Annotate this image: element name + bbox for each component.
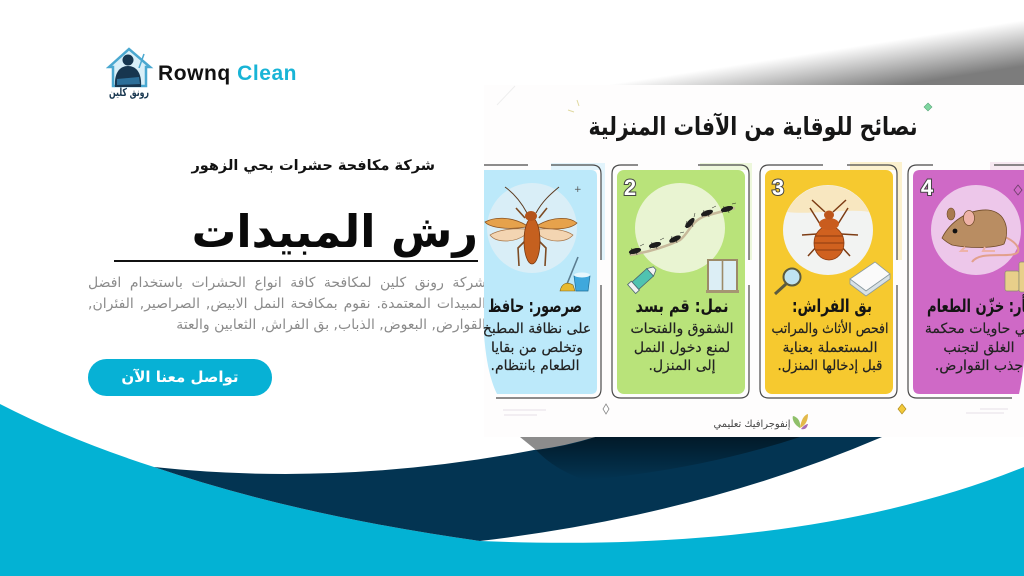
- card 3 heading: بق الفراش:: [792, 296, 872, 317]
- icon: mop and bucket: [560, 257, 590, 291]
- card 2 body text: إلى المنزل.: [648, 358, 716, 374]
- card 1: cockroach: +: [574, 185, 582, 195]
- card 3: bed bug: [760, 162, 902, 398]
- icon: sealant tube: [628, 264, 659, 294]
- number 2: 2: [624, 175, 636, 200]
- description paragraph: [88, 275, 486, 333]
- contact button: [88, 359, 272, 396]
- card 3 body text: المستعملة بعناية: [783, 340, 877, 356]
- icon: food jars: [1005, 262, 1024, 292]
- contact button: تواصل معنا الآن: [121, 368, 239, 386]
- card 1 heading: صرصور: حافظ: [488, 296, 582, 317]
- icon: mattress: [850, 262, 890, 296]
- icon: green diamond: [924, 103, 932, 111]
- card 4 body text: جذب القوارض.: [935, 358, 1023, 374]
- icon: ant trail: [629, 203, 736, 255]
- card 1 body text: وتخلص من بقايا: [491, 340, 583, 356]
- icon: leaves: [793, 414, 808, 429]
- card 1: cockroach: [483, 163, 605, 398]
- card 1 body text: [483, 321, 591, 374]
- brand name: Rownq Clean: [158, 62, 297, 85]
- card 2 body text: الشقوق والفتحات: [631, 321, 733, 337]
- card 3 body text: [772, 319, 888, 374]
- card 2 body text: [631, 321, 733, 374]
- footer label: إنفوجرافيك تعليمي: [714, 419, 791, 430]
- icon: bed bug: [802, 200, 858, 260]
- logo: [106, 47, 154, 99]
- card 2: ants: [612, 163, 752, 398]
- card 2 body text: لمنع دخول النمل: [634, 340, 730, 356]
- subtitle: شركة مكافحة حشرات بحي الزهور: [191, 158, 435, 174]
- icon: magnifying glass: [775, 268, 800, 294]
- card 3 body text: افحص الأثاث والمراتب: [772, 319, 888, 337]
- icon: mouse: [942, 208, 1018, 262]
- description paragraph: شركة رونق كلين لمكافحة كافة انواع الحشرات باستخدام افضل: [88, 275, 486, 291]
- card 4 body text: الغلق لتجنب: [943, 340, 1015, 356]
- decorative sparks: [497, 86, 579, 112]
- main heading: [114, 200, 478, 262]
- card 4: mouse: [908, 162, 1024, 398]
- card 1 body text: على نظافة المطبخ: [484, 321, 591, 337]
- card 3 body text: قبل إدخالها المنزل.: [778, 358, 882, 374]
- icon: yellow diamond: [898, 404, 906, 414]
- card 1 body text: الطعام بانتظام.: [491, 358, 579, 374]
- description paragraph: المبيدات المعتمدة. نقوم بمكافحة النمل الابيض, الصراصير, الفئران,: [88, 296, 486, 312]
- card 2 heading: نمل: قم بسد: [636, 296, 728, 317]
- number 4: 4: [921, 175, 934, 200]
- card 4 body text: [925, 321, 1024, 374]
- number 3: 3: [772, 175, 784, 200]
- icon: window: [706, 260, 739, 293]
- infographic title: نصائح للوقاية من الآفات المنزلية: [588, 112, 918, 142]
- icon: gray diamond: [603, 404, 609, 414]
- main heading: رش المبيدات: [192, 207, 478, 258]
- description paragraph: القوارض, البعوض, الذباب, بق الفراش, الثعابين والعتة: [176, 317, 486, 333]
- panel: pest prevention infographic: [484, 86, 1024, 430]
- icon: cockroach: [485, 187, 577, 266]
